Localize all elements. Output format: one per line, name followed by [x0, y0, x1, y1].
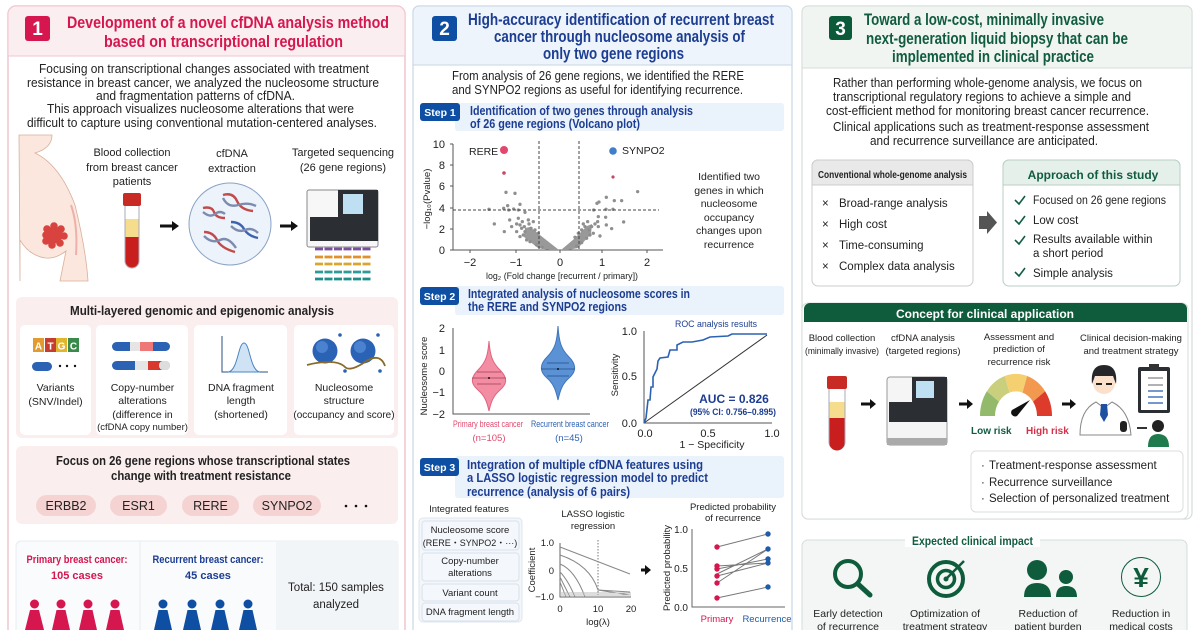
LASSO ticks: 0	[549, 566, 554, 577]
panel 3 header	[802, 6, 1192, 68]
icon: cfDNA circle	[189, 183, 271, 265]
blue violin	[541, 326, 575, 400]
badge 2	[432, 16, 457, 41]
panel 1 title: based on transcriptional regulation	[104, 32, 343, 51]
volcano plot	[422, 139, 665, 282]
card: copy-number alterations: Copy-number	[111, 382, 175, 394]
icon: risk gauge	[971, 374, 1069, 437]
impact labels	[813, 608, 1173, 630]
badge 2: 2	[439, 19, 450, 40]
ROC curve	[610, 319, 780, 451]
step labels: recurrence risk	[988, 357, 1051, 368]
integrated features list: Copy-number	[441, 556, 499, 567]
card: nucleosome structure	[293, 325, 395, 435]
panel 3 intro text: cost-efficient method for monitoring breast cancer recurrence.	[826, 103, 1149, 118]
card: variants: Variants	[37, 382, 74, 394]
panel 2 title: cancer through nucleosome analysis of	[494, 27, 745, 46]
primary count	[26, 554, 128, 582]
axis tick labels: 2	[439, 224, 445, 236]
panel 1 header	[8, 6, 405, 56]
clinical uses list: ·	[981, 460, 985, 472]
axis tick labels: 4	[439, 203, 445, 215]
ROC axis titles: 1 − Specificity	[679, 439, 745, 451]
concept heading: Concept for clinical application	[896, 307, 1074, 321]
card: variants: T	[47, 342, 54, 352]
gene pills	[36, 495, 367, 516]
conventional analysis box: Conventional whole-genome analysis	[818, 169, 967, 181]
step labels: Assessment and	[984, 332, 1054, 343]
panel 1 title: Development of a novel cfDNA analysis method	[67, 13, 389, 32]
step labels: Clinical decision-making	[1080, 333, 1182, 344]
conventional list: High cost	[839, 219, 888, 231]
heading: Multi-layered genomic and epigenomic analysis	[70, 303, 334, 318]
primary count: Primary breast cancer:	[26, 554, 128, 566]
clinical uses list: Treatment-response assessment	[989, 460, 1157, 472]
violin labels	[453, 419, 609, 444]
step 3 heading: recurrence (analysis of 6 pairs)	[467, 485, 630, 499]
step 1 heading: Step 1	[424, 107, 456, 119]
LASSO ticks: 1.0	[541, 538, 554, 549]
arrow	[1062, 399, 1076, 409]
panel 1 intro text: This approach visualizes nucleosome alterations that were	[47, 101, 354, 116]
panel 3 intro text: transcriptional regulatory regions to achieve a simple and	[833, 89, 1131, 104]
card: nucleosome structure: Nucleosome	[315, 382, 373, 394]
axis tick labels	[433, 139, 650, 269]
RERE marker	[469, 146, 508, 175]
label: cfDNA extraction: cfDNA	[216, 148, 249, 160]
LASSO ticks: 0	[557, 604, 563, 615]
axis tick labels: 0	[439, 245, 445, 257]
ROC curve: ROC analysis results	[675, 319, 757, 330]
icon: sequencer with reads	[307, 190, 378, 279]
LASSO ticks: 10	[593, 604, 603, 615]
card: variants	[20, 325, 91, 435]
panel 1 title	[67, 13, 389, 51]
integrated features list: (RERE・SYNPO2・···)	[423, 538, 517, 548]
card: copy-number alterations: (difference in	[112, 409, 173, 421]
icon: blood tube	[827, 376, 847, 451]
LASSO ticks: −1.0	[535, 592, 554, 603]
study list: Results available within	[1033, 234, 1153, 246]
step 2 heading: Integrated analysis of nucleosome scores in	[468, 287, 690, 301]
card: copy-number alterations	[96, 325, 188, 435]
panel 3 intro text	[826, 75, 1149, 148]
multi-layered analysis box	[16, 297, 398, 438]
pink violin	[472, 341, 506, 411]
gene pills: SYNPO2	[262, 499, 312, 513]
concept panel	[802, 303, 1188, 519]
cohort box	[16, 541, 398, 630]
card: variants: (SNV/Indel)	[28, 396, 83, 408]
gene pills: ERBB2	[46, 499, 87, 513]
AUC callout: (95% CI: 0.756–0.895)	[690, 407, 776, 417]
conventional list: ×	[822, 261, 829, 273]
step labels: prediction of	[993, 344, 1045, 355]
ROC axis titles	[610, 353, 745, 451]
recurrent count	[152, 554, 264, 582]
focus heading: change with treatment resistance	[111, 468, 291, 483]
panel 1 intro text: and fragmentation patterns of cfDNA.	[96, 88, 295, 103]
volcano side note: nucleosome	[701, 198, 757, 210]
card: variants: G	[58, 342, 66, 352]
SYNPO2 marker: SYNPO2	[622, 145, 665, 157]
axis titles: −log₁₀(Pvalue)	[422, 169, 433, 229]
panel 2 title: only two gene regions	[543, 44, 684, 63]
total	[288, 582, 384, 611]
step 2 heading: Step 2	[424, 291, 455, 303]
conventional list: Time-consuming	[839, 240, 924, 252]
panel 2 title	[468, 10, 774, 63]
prediction ticks: 1.0	[674, 525, 688, 536]
axis tick labels: 6	[439, 181, 445, 193]
ROC tick labels: 1.0	[622, 326, 637, 338]
badge 3: 3	[835, 19, 846, 40]
badge 1	[25, 16, 50, 41]
concept heading	[804, 303, 1187, 322]
violin labels: (n=45)	[555, 433, 583, 444]
arrow	[959, 399, 973, 409]
primary count: 105 cases	[51, 570, 103, 582]
card: nucleosome structure: (occupancy and score)	[293, 410, 395, 421]
card: DNA fragment length	[194, 325, 287, 435]
badge 1: 1	[32, 19, 43, 40]
axis tick labels: 1	[599, 257, 605, 269]
axis titles: log₂ (Fold change [recurrent / primary])	[486, 271, 638, 282]
conventional list	[822, 198, 955, 273]
integrated features list: Variant count	[442, 588, 498, 599]
step labels: and treatment strategy	[1083, 346, 1179, 357]
label: targeted sequencing	[292, 147, 394, 174]
card: copy-number alterations: (cfDNA copy number)	[97, 422, 188, 433]
predicted probability chart: Predicted probability	[662, 525, 673, 611]
axis tick labels: 8	[439, 160, 445, 172]
conventional list: ×	[822, 219, 829, 231]
ROC tick labels: 0.5	[700, 428, 716, 440]
step labels	[805, 332, 1182, 368]
total: Total: 150 samples	[288, 582, 384, 594]
card: copy-number alterations: alterations	[118, 395, 167, 407]
panel 1 intro text: difficult to capture using conventional mutation-centered analyses.	[27, 115, 377, 130]
predicted probability chart	[662, 502, 792, 625]
this study box	[1003, 160, 1180, 286]
icon: yen: ¥	[1133, 562, 1149, 593]
clinical uses list: Selection of personalized treatment	[989, 493, 1170, 505]
ROC tick labels: 0.5	[622, 371, 637, 383]
panel 3 intro text: Rather than performing whole-genome analysis, we focus on	[833, 75, 1142, 90]
integrated features list: DNA fragment length	[426, 607, 514, 618]
conventional list: ×	[822, 198, 829, 210]
panel 3 intro text: Clinical applications such as treatment-response assessment	[833, 119, 1149, 134]
LASSO ticks: log(λ)	[586, 617, 610, 628]
conventional list: Broad-range analysis	[839, 198, 948, 210]
conventional list: Complex data analysis	[839, 261, 955, 273]
conventional list: ×	[822, 240, 829, 252]
clinical uses list: Recurrence surveillance	[989, 477, 1112, 489]
icon: clipboard	[1138, 364, 1170, 413]
axis tick labels: −2	[464, 257, 476, 269]
total: analyzed	[313, 599, 359, 611]
panel 3 title: next-generation liquid biopsy that can be	[866, 29, 1128, 48]
label: cfDNA extraction	[208, 148, 256, 175]
impact labels: Early detection	[813, 608, 883, 620]
icons: recurrent patients	[154, 600, 257, 630]
icon: breast with tumor	[19, 135, 88, 281]
panel 3 title: implemented in clinical practice	[892, 47, 1094, 66]
LASSO ticks	[535, 538, 636, 628]
predicted probability chart: Recurrence	[742, 614, 792, 625]
ROC tick labels: 0.0	[637, 428, 653, 440]
focus heading: Focus on 26 gene regions whose transcriptional states	[56, 453, 350, 468]
violin tick labels	[432, 323, 445, 421]
icon: yen	[1122, 558, 1160, 596]
ROC tick labels: 0.0	[622, 418, 637, 430]
violin plot	[419, 323, 609, 444]
card: DNA fragment length: (shortened)	[214, 409, 268, 421]
step labels: cfDNA analysis	[891, 333, 955, 344]
RERE marker: RERE	[469, 146, 498, 158]
label: blood collection: Blood collection	[93, 147, 171, 159]
arrow: conventional to this study	[979, 211, 997, 234]
card: variants: C	[70, 342, 77, 352]
SYNPO2 marker	[609, 145, 665, 179]
label: blood collection: from breast cancer	[86, 162, 178, 174]
panel 3 title	[864, 10, 1128, 66]
predicted probability chart: Predicted probability	[690, 502, 776, 513]
ROC tick labels	[622, 326, 780, 440]
step labels: (targeted regions)	[886, 346, 960, 357]
label: blood collection	[86, 147, 178, 188]
axis tick labels: 2	[644, 257, 650, 269]
step labels: Blood collection	[809, 333, 875, 344]
arrow	[861, 399, 876, 409]
violin tick labels: 2	[439, 323, 445, 335]
icon: blood tube	[123, 193, 141, 268]
step 3 heading	[420, 456, 784, 499]
impact labels: Reduction in	[1112, 608, 1170, 620]
integrated features list: Integrated features	[429, 504, 509, 515]
AUC callout: AUC = 0.826	[699, 392, 769, 406]
panel 2 intro text: and SYNPO2 regions as useful for identifying recurrence.	[452, 82, 743, 97]
step 1 heading: Identification of two genes through analysis	[470, 104, 693, 118]
panel 2 header	[413, 6, 792, 65]
expected clinical impact	[802, 534, 1187, 630]
ROC tick labels: 1.0	[764, 428, 780, 440]
predicted probability chart: of recurrence	[705, 513, 761, 524]
violin tick labels: −1	[432, 387, 445, 399]
volcano side note: occupancy	[704, 212, 755, 224]
violin labels: (n=105)	[472, 433, 506, 444]
step 3 heading: Step 3	[424, 462, 455, 474]
panel 1 intro text: resistance in breast cancer, we analyzed the nucleosome structure	[27, 75, 379, 90]
icon: doctor	[1080, 365, 1131, 435]
axis titles	[422, 169, 638, 282]
violin labels: Recurrent breast cancer	[531, 419, 609, 430]
panel 2 intro text: From analysis of 26 gene regions, we identified the RERE	[452, 68, 744, 83]
this study box: Approach of this study	[1028, 168, 1159, 182]
violin tick labels: 0	[439, 366, 445, 378]
violin tick labels: −2	[432, 409, 445, 421]
volcano side note: Identified two	[698, 171, 760, 183]
recurrent count: Recurrent breast cancer:	[152, 554, 264, 566]
icon: target	[929, 561, 964, 596]
study list: Simple analysis	[1033, 268, 1113, 280]
AUC callout	[690, 392, 776, 417]
LASSO chart: regression	[571, 521, 615, 532]
ROC axis titles: Sensitivity	[610, 353, 621, 396]
impact labels: Optimization of	[910, 608, 980, 620]
violin labels: Primary breast cancer	[453, 419, 523, 430]
focus on 26 gene regions box	[16, 446, 398, 524]
study list: Focused on 26 gene regions	[1033, 195, 1166, 207]
threshold lines	[453, 141, 659, 250]
impact labels: Reduction of	[1019, 608, 1078, 620]
icon: sequencer	[887, 377, 947, 445]
card: DNA fragment length: DNA fragment	[208, 382, 274, 394]
step 1 heading	[420, 103, 784, 131]
icon: risk gauge: Low risk	[971, 426, 1012, 437]
LASSO chart: LASSO logistic	[561, 509, 625, 520]
study list: Low cost	[1033, 215, 1079, 227]
LASSO ticks: 20	[626, 604, 636, 615]
clinical uses list: ·	[981, 493, 985, 505]
step 3 heading: Integration of multiple cfDNA features using	[467, 458, 703, 472]
card: nucleosome structure: structure	[324, 395, 365, 407]
violin plot: Nucleosome score	[419, 337, 430, 415]
badge 3	[829, 16, 852, 40]
clinical uses list	[971, 451, 1183, 512]
integrated features list: alterations	[448, 568, 492, 579]
study list: a short period	[1033, 248, 1103, 260]
study list	[1033, 195, 1166, 280]
prediction ticks: 0.5	[674, 564, 688, 575]
volcano side note	[694, 171, 764, 251]
violin tick labels: 1	[439, 345, 445, 357]
axis tick labels: 0	[557, 257, 563, 269]
volcano side note: recurrence	[704, 239, 754, 251]
panel 3 title: Toward a low-cost, minimally invasive	[864, 10, 1104, 29]
step 2 heading: the RERE and SYNPO2 regions	[468, 300, 627, 314]
axis tick labels: −1	[510, 257, 522, 269]
arrow	[280, 221, 298, 231]
panel 2 intro text	[452, 68, 744, 97]
label: cfDNA extraction: extraction	[208, 163, 256, 175]
panel 3 intro text: and recurrence surveillance are anticipated.	[870, 133, 1098, 148]
panel 1 intro text	[27, 61, 379, 130]
volcano side note: changes upon	[696, 225, 762, 237]
clinical uses list: ·	[981, 477, 985, 489]
step labels: (minimally invasive)	[805, 346, 879, 357]
label: blood collection: patients	[113, 176, 152, 188]
step 3 heading: a LASSO logistic regression model to predict	[467, 471, 709, 485]
panel 2: identification	[413, 6, 792, 630]
panel 1: method development	[8, 6, 405, 630]
conventional analysis box	[812, 160, 973, 286]
step 1 heading: of 26 gene regions (Volcano plot)	[470, 117, 640, 131]
LASSO chart	[527, 509, 636, 628]
gene pills: ESR1	[122, 499, 155, 513]
icon: risk gauge: High risk	[1026, 426, 1069, 437]
step 2 heading	[420, 286, 784, 315]
label: targeted sequencing: (26 gene regions)	[300, 162, 386, 174]
icon: patients	[1024, 560, 1077, 597]
impact heading: Expected clinical impact	[912, 534, 1033, 548]
volcano side note: genes in which	[694, 185, 764, 197]
label: targeted sequencing: Targeted sequencing	[292, 147, 394, 159]
icon: patient	[1137, 420, 1169, 447]
integrated features list	[419, 504, 522, 622]
axis tick labels: 10	[433, 139, 445, 151]
panel 1 intro text: Focusing on transcriptional changes associated with treatment	[39, 61, 369, 76]
gene pills: RERE	[193, 499, 228, 513]
predicted probability chart: Primary	[701, 614, 734, 625]
panel 2 title: High-accuracy identification of recurrent breast	[468, 10, 774, 29]
LASSO chart: Coefficient	[527, 547, 538, 592]
card: DNA fragment length: length	[227, 395, 255, 407]
integrated features list: Nucleosome score	[431, 525, 509, 536]
checks	[1015, 196, 1025, 276]
arrow	[641, 565, 651, 575]
arrow	[160, 221, 179, 231]
recurrent count: 45 cases	[185, 570, 231, 582]
panel 3: clinical outlook	[802, 6, 1192, 519]
focus heading	[56, 453, 350, 483]
icons: primary patients	[25, 600, 124, 630]
prediction ticks	[674, 525, 688, 614]
card: variants: A	[35, 342, 42, 352]
prediction ticks: 0.0	[674, 603, 688, 614]
icon: magnifier	[835, 561, 870, 595]
